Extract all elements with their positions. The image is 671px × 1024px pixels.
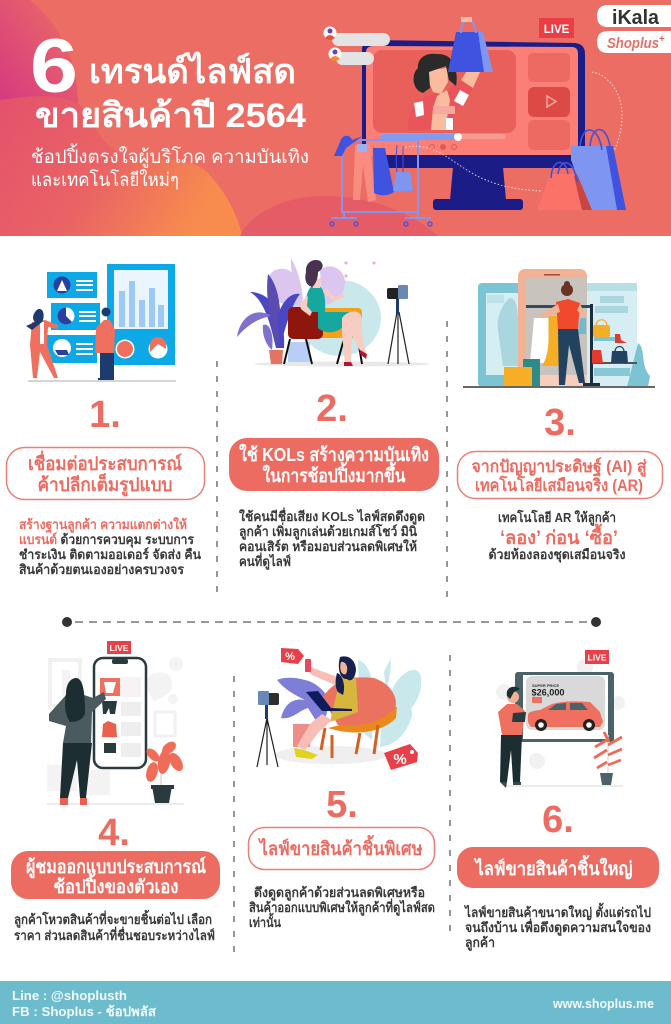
chat bubbles: [324, 26, 390, 65]
footer contact text: Line : @shoplusth: [12, 988, 127, 1003]
footer contact text: [12, 988, 156, 1019]
body text 6: ไลฟ์ขายสินค้าขนาดใหญ่ ตั้งแต่รถไป: [463, 902, 651, 921]
heading pill 2: [229, 438, 439, 491]
icon: discount tag small: %: [285, 651, 295, 663]
title: ขายสินค้าปี 2564: [35, 97, 306, 135]
number 5: 5.: [326, 784, 358, 826]
header banner: [0, 0, 671, 236]
panel: trend 3: [458, 269, 662, 563]
panel: trend 2: [229, 258, 439, 570]
heading pill 2: ในการช้อปปิ้งมากขึ้น: [262, 462, 406, 486]
icon: LIVE badge: [539, 18, 574, 38]
heading pill 6: ไลฟ์ขายสินค้าชิ้นใหญ่: [474, 855, 633, 880]
body text 5: เท่านั้น: [249, 912, 281, 930]
number 2: 2.: [316, 388, 348, 430]
panel: trend 5: [248, 648, 435, 930]
number 6: 6.: [542, 799, 574, 841]
illustration: car live sale: $26,000: [532, 688, 564, 698]
number 4: 4.: [98, 812, 130, 854]
illustration: clothes rack: [330, 136, 432, 226]
footer website: www.shoplus.me: [552, 996, 654, 1011]
illustration: car live sale: [496, 650, 625, 788]
body text 4: [14, 909, 215, 943]
heading pill 3: จากปัญญาประดิษฐ์ (AI) สู่: [472, 457, 647, 478]
subtitle: [31, 143, 309, 190]
logo: Shoplus: [597, 31, 671, 53]
title: 6: [30, 24, 78, 109]
heading pill 4: ผู้ชมออกแบบประสบการณ์: [26, 856, 206, 879]
logo: Shoplus: +: [659, 34, 665, 45]
number 3: 3.: [544, 402, 576, 444]
illustration: AR fitting room: [463, 269, 655, 388]
body text 2: ลูกค้า เพิ่มลูกเล่นด้วยเกมส์โชว์ มินิ: [239, 522, 417, 540]
heading pill 1: ค้าปลีกเต็มรูปแบบ: [38, 472, 172, 497]
divider lines: [62, 321, 601, 960]
number 1: 1.: [89, 394, 121, 436]
icon: blue shopping bag: [448, 17, 493, 72]
heading pill 4: ช้อปปิ้งของตัวเอง: [54, 873, 178, 897]
heading pill 5: ไลฟ์ขายสินค้าชิ้นพิเศษ: [258, 835, 422, 859]
panel: trend 6: [457, 650, 659, 951]
illustration: seller with laptop: [257, 648, 421, 770]
body text 3: [488, 509, 626, 563]
footer bar: [0, 981, 671, 1024]
icon: LIVE badge: LIVE: [110, 643, 129, 653]
body text 6: จนถึงบ้าน เพื่อดึงดูดความสนใจของ: [465, 918, 651, 936]
body text 6: [463, 902, 651, 951]
body text 2: คนที่ดูไลฟ์: [239, 552, 291, 570]
icon: LIVE badge: LIVE: [544, 24, 570, 36]
heading pill 3: [458, 452, 662, 498]
body text 2: ใช้คนมีชื่อเสียง KOLs ไลฟ์สดดึงดูด: [239, 507, 425, 525]
panel: trend 1: [6, 264, 204, 577]
illustration: car live sale: SUPER PRICE: [532, 683, 559, 688]
illustration: presenter woman: [408, 54, 480, 130]
heading pill 6: [457, 847, 659, 888]
illustration: dashboard presenters: [26, 264, 176, 382]
icon: discount tag large: [384, 744, 418, 770]
body text 4: ราคา ส่วนลดสินค้าที่ชื่นชอบระหว่างไลฟ์: [14, 926, 215, 943]
subtitle: และเทคโนโลยีใหม่ๆ: [31, 169, 179, 190]
body text 6: ลูกค้า: [465, 935, 495, 951]
icon: LIVE badge: [107, 641, 131, 654]
illustration: KOL on chair: [237, 258, 430, 366]
logo: iKala: [597, 5, 671, 29]
body text 2: [239, 507, 425, 570]
panel: trend 4: [11, 641, 220, 943]
body text 1: สินค้าด้วยตนเองอย่างครบวงจร: [19, 562, 184, 577]
icon: discount tag large: %: [393, 751, 407, 768]
subtitle: ช้อปปิ้งตรงใจผู้บริโภค ความบันเทิง: [31, 143, 309, 168]
illustration: phone shopper: [47, 641, 186, 805]
body text 1: สร้างฐานลูกค้า ความแตกต่างให้: [19, 516, 187, 534]
heading pill 2: ใช้ KOLs สร้างความบันเทิง: [239, 443, 429, 465]
body text 5: [249, 885, 435, 930]
body text 3: ด้วยห้องลองชุดเสมือนจริง: [488, 547, 626, 563]
heading pill 1: [6, 448, 204, 500]
body text 1: แบรนด์ ด้วยการควบคุม ระบบการ: [19, 532, 194, 548]
logo: iKala: iKala: [612, 7, 660, 29]
body text 3: ‘ลอง’ ก่อน ‘ซื้อ’: [500, 523, 618, 549]
body text 2: คอนเสิร์ต หรือมอบส่วนลดพิเศษให้: [239, 538, 417, 554]
icon: LIVE badge: LIVE: [588, 652, 607, 662]
heading pill 1: เชื่อมต่อประสบการณ์: [28, 450, 182, 474]
heading pill 5: [248, 828, 434, 870]
icon: discount tag small: [281, 648, 304, 664]
illustration: live monitor: [324, 17, 626, 226]
illustration: shopping bags: [537, 130, 626, 210]
body text 5: สินค้าออกแบบพิเศษให้ลูกค้าที่ดูไลฟ์สด: [249, 898, 435, 916]
heading pill 3: เทคโนโลยีเสมือนจริง (AR): [475, 475, 643, 495]
title: [30, 24, 306, 135]
body text 4: ลูกค้าโหวตสินค้าที่จะขายชิ้นต่อไป เลือก: [14, 909, 212, 928]
body text 1: ชำระเงิน ติดตามออเดอร์ จัดส่ง คืน: [19, 547, 201, 562]
body text 1: [19, 516, 201, 577]
title: เทรนด์ไลฟ์สด: [89, 51, 296, 91]
logo: Shoplus: Shoplus: [607, 35, 659, 52]
body text 3: เทคโนโลยี AR ให้ลูกค้า: [498, 509, 616, 526]
dotted motion path: [402, 72, 622, 191]
footer contact text: FB : Shoplus - ช้อปพลัส: [12, 1004, 156, 1019]
body text 5: ดึงดูดลูกค้าด้วยส่วนลดพิเศษหรือ: [254, 885, 425, 901]
heading pill 4: [11, 851, 220, 899]
